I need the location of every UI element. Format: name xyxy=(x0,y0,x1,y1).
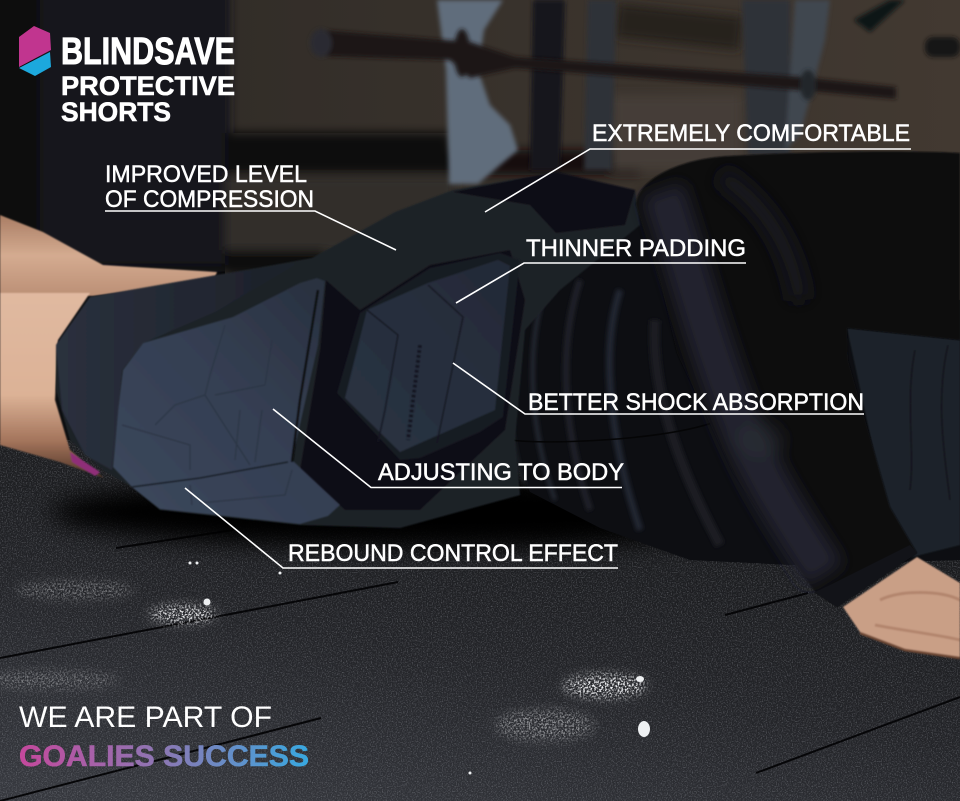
background torso cloth at right xyxy=(847,328,960,560)
protective shorts xyxy=(56,172,640,528)
callout: adjusting to body xyxy=(273,409,624,488)
callout: extremely comfortable xyxy=(485,120,911,212)
tagline: GOALIES SUCCESS xyxy=(19,740,309,773)
right leg and arm sleeve xyxy=(630,150,960,615)
athlete's forearms and legs (skin) xyxy=(0,215,217,478)
callout: thinner padding xyxy=(456,235,746,303)
brand title xyxy=(61,31,235,127)
callout: adjusting to body: ADJUSTING TO BODY xyxy=(378,459,624,486)
callout: rebound control effect xyxy=(185,488,618,568)
logo mark xyxy=(19,26,51,76)
rack uprights xyxy=(437,0,905,184)
tagline xyxy=(19,701,309,773)
brand title: BLINDSAVE xyxy=(61,31,235,73)
chalk dust xyxy=(0,562,650,774)
brand title: PROTECTIVE xyxy=(61,71,235,101)
barbell xyxy=(310,29,960,100)
callout: better shock absorption: BETTER SHOCK ABSORPTION xyxy=(528,389,864,416)
thigh pad xyxy=(113,278,340,524)
callout: rebound control effect: REBOUND CONTROL EFFECT xyxy=(288,540,618,567)
callout: better shock absorption xyxy=(453,363,864,416)
callout: improved level of compression: OF COMPRESSION xyxy=(105,186,314,213)
callout: extremely comfortable: EXTREMELY COMFORTABLE xyxy=(592,120,910,147)
tagline: WE ARE PART OF xyxy=(19,701,272,734)
callout: thinner padding: THINNER PADDING xyxy=(526,235,746,262)
torso shirt xyxy=(505,200,960,565)
brand title: SHORTS xyxy=(61,97,171,127)
hip pad xyxy=(337,253,520,460)
hand on floor xyxy=(843,557,960,658)
callout: improved level of compression xyxy=(105,161,396,250)
floor with speckle and seam lines xyxy=(0,440,960,801)
callout: improved level of compression: IMPROVED LEVEL xyxy=(105,161,307,188)
